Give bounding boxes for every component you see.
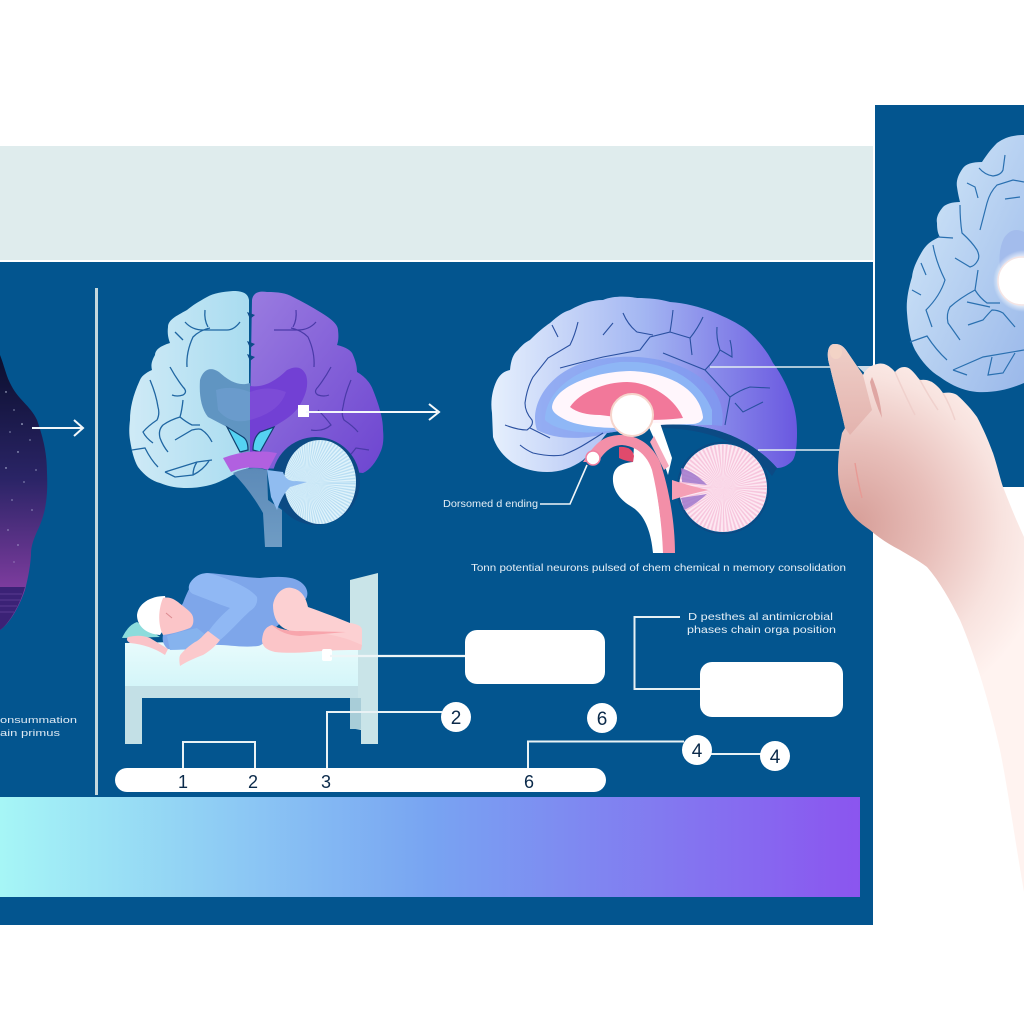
cerebellar peduncle [267, 470, 307, 510]
central fissure notches [247, 312, 255, 361]
connector: bed to box [322, 649, 466, 661]
number badge 4 left: 4 [692, 741, 703, 762]
right blue panel [875, 105, 1024, 487]
right sulci [274, 310, 369, 462]
top pale header band [0, 146, 873, 260]
caption: night sky [0, 715, 77, 739]
bed frame [125, 686, 358, 744]
finger shadows [895, 372, 955, 420]
note text [687, 612, 836, 636]
headboard [350, 573, 378, 744]
night sky illustration [0, 355, 47, 630]
timeline connectors [183, 712, 762, 768]
cerebellar rim [660, 424, 777, 476]
note text: phases chain orga position [687, 625, 836, 636]
brain 1: coronal view [129, 291, 383, 547]
timeline pill [115, 768, 606, 792]
pink fornix [570, 382, 683, 420]
upper leg [273, 588, 362, 645]
caption: night sky: onsummation [0, 715, 77, 726]
pillow [122, 622, 160, 638]
diagonal strip below thalamus [647, 423, 672, 475]
nail [830, 345, 842, 359]
callout lines: brain 2 [710, 367, 840, 450]
number badge 6: 6 [597, 709, 607, 730]
number badge 4 right [760, 741, 790, 771]
pointer: brain 1 to right [298, 404, 439, 420]
main blue panel [0, 262, 873, 925]
caption: night sky: ain primus [0, 728, 60, 739]
left sulci [132, 310, 240, 477]
right hemisphere [249, 292, 383, 473]
sleeping figure on bed [122, 573, 378, 744]
face [159, 597, 193, 635]
hand [179, 631, 220, 666]
finger crease [870, 377, 882, 418]
left hemisphere [129, 291, 249, 488]
red mid-brain spot [619, 447, 634, 462]
mattress [125, 642, 358, 686]
hand pointing [828, 344, 1024, 892]
cyan wedges [227, 427, 248, 452]
timeline pill: 2 [248, 772, 258, 792]
timeline pill: 3 [321, 772, 331, 792]
sulci [910, 155, 1024, 375]
inner bed leg [350, 698, 361, 729]
brainstem [233, 468, 282, 547]
inner ventricle: right [250, 367, 307, 460]
brain 2: sagittal view [491, 297, 797, 553]
purple band [223, 451, 277, 472]
timeline pill: 6 [524, 772, 534, 792]
thalamus circle [611, 394, 653, 436]
label box 1 [465, 630, 605, 684]
eye [166, 613, 172, 618]
inner ventricle: left [200, 369, 250, 460]
pale line behind hand [857, 366, 880, 378]
sulci [505, 310, 770, 456]
callout: dorsomedial label [443, 465, 587, 510]
white brainstem blob [613, 446, 664, 553]
thumb crease [855, 463, 862, 498]
pink brainstem [583, 435, 675, 553]
inner blue band [535, 357, 723, 438]
vertical divider [95, 288, 98, 795]
label box 2 [700, 662, 843, 717]
bracket: note to box 2 [634, 617, 700, 689]
head cap [137, 596, 170, 635]
torso [163, 573, 307, 650]
number badge 4 left [682, 735, 712, 765]
lower leg [262, 625, 362, 653]
timeline pill: 1 [178, 772, 188, 792]
note text: D pesthes al antimicrobial [688, 612, 833, 623]
index finger [828, 344, 872, 435]
brain 3: right panel [907, 135, 1024, 392]
cortex [491, 297, 797, 472]
callout: dorsomedial label: Dorsomed d ending [443, 499, 538, 510]
cerebellum fan [284, 440, 356, 524]
sleeve arm [189, 573, 257, 640]
number badge 6 [587, 703, 617, 733]
gradient bar [0, 797, 860, 897]
inner shadow [1000, 230, 1024, 268]
arrow: night to brain [32, 420, 83, 436]
number badge 4 right: 4 [770, 747, 781, 768]
caption: brain row: Tonn potential neurons pulsed of chem chemical n memory consolidation [471, 563, 846, 574]
white glow [993, 250, 1024, 312]
blanket fold [167, 628, 212, 650]
thalamus blobs [216, 388, 250, 421]
cerebellum fan [672, 442, 768, 534]
number badge 2: 2 [451, 708, 461, 729]
dark arc [272, 437, 360, 525]
pituitary white node [586, 451, 600, 465]
far arm [127, 636, 168, 655]
number badge 2 [441, 702, 471, 732]
cortex [907, 135, 1024, 392]
white corpus callosum [552, 371, 703, 428]
